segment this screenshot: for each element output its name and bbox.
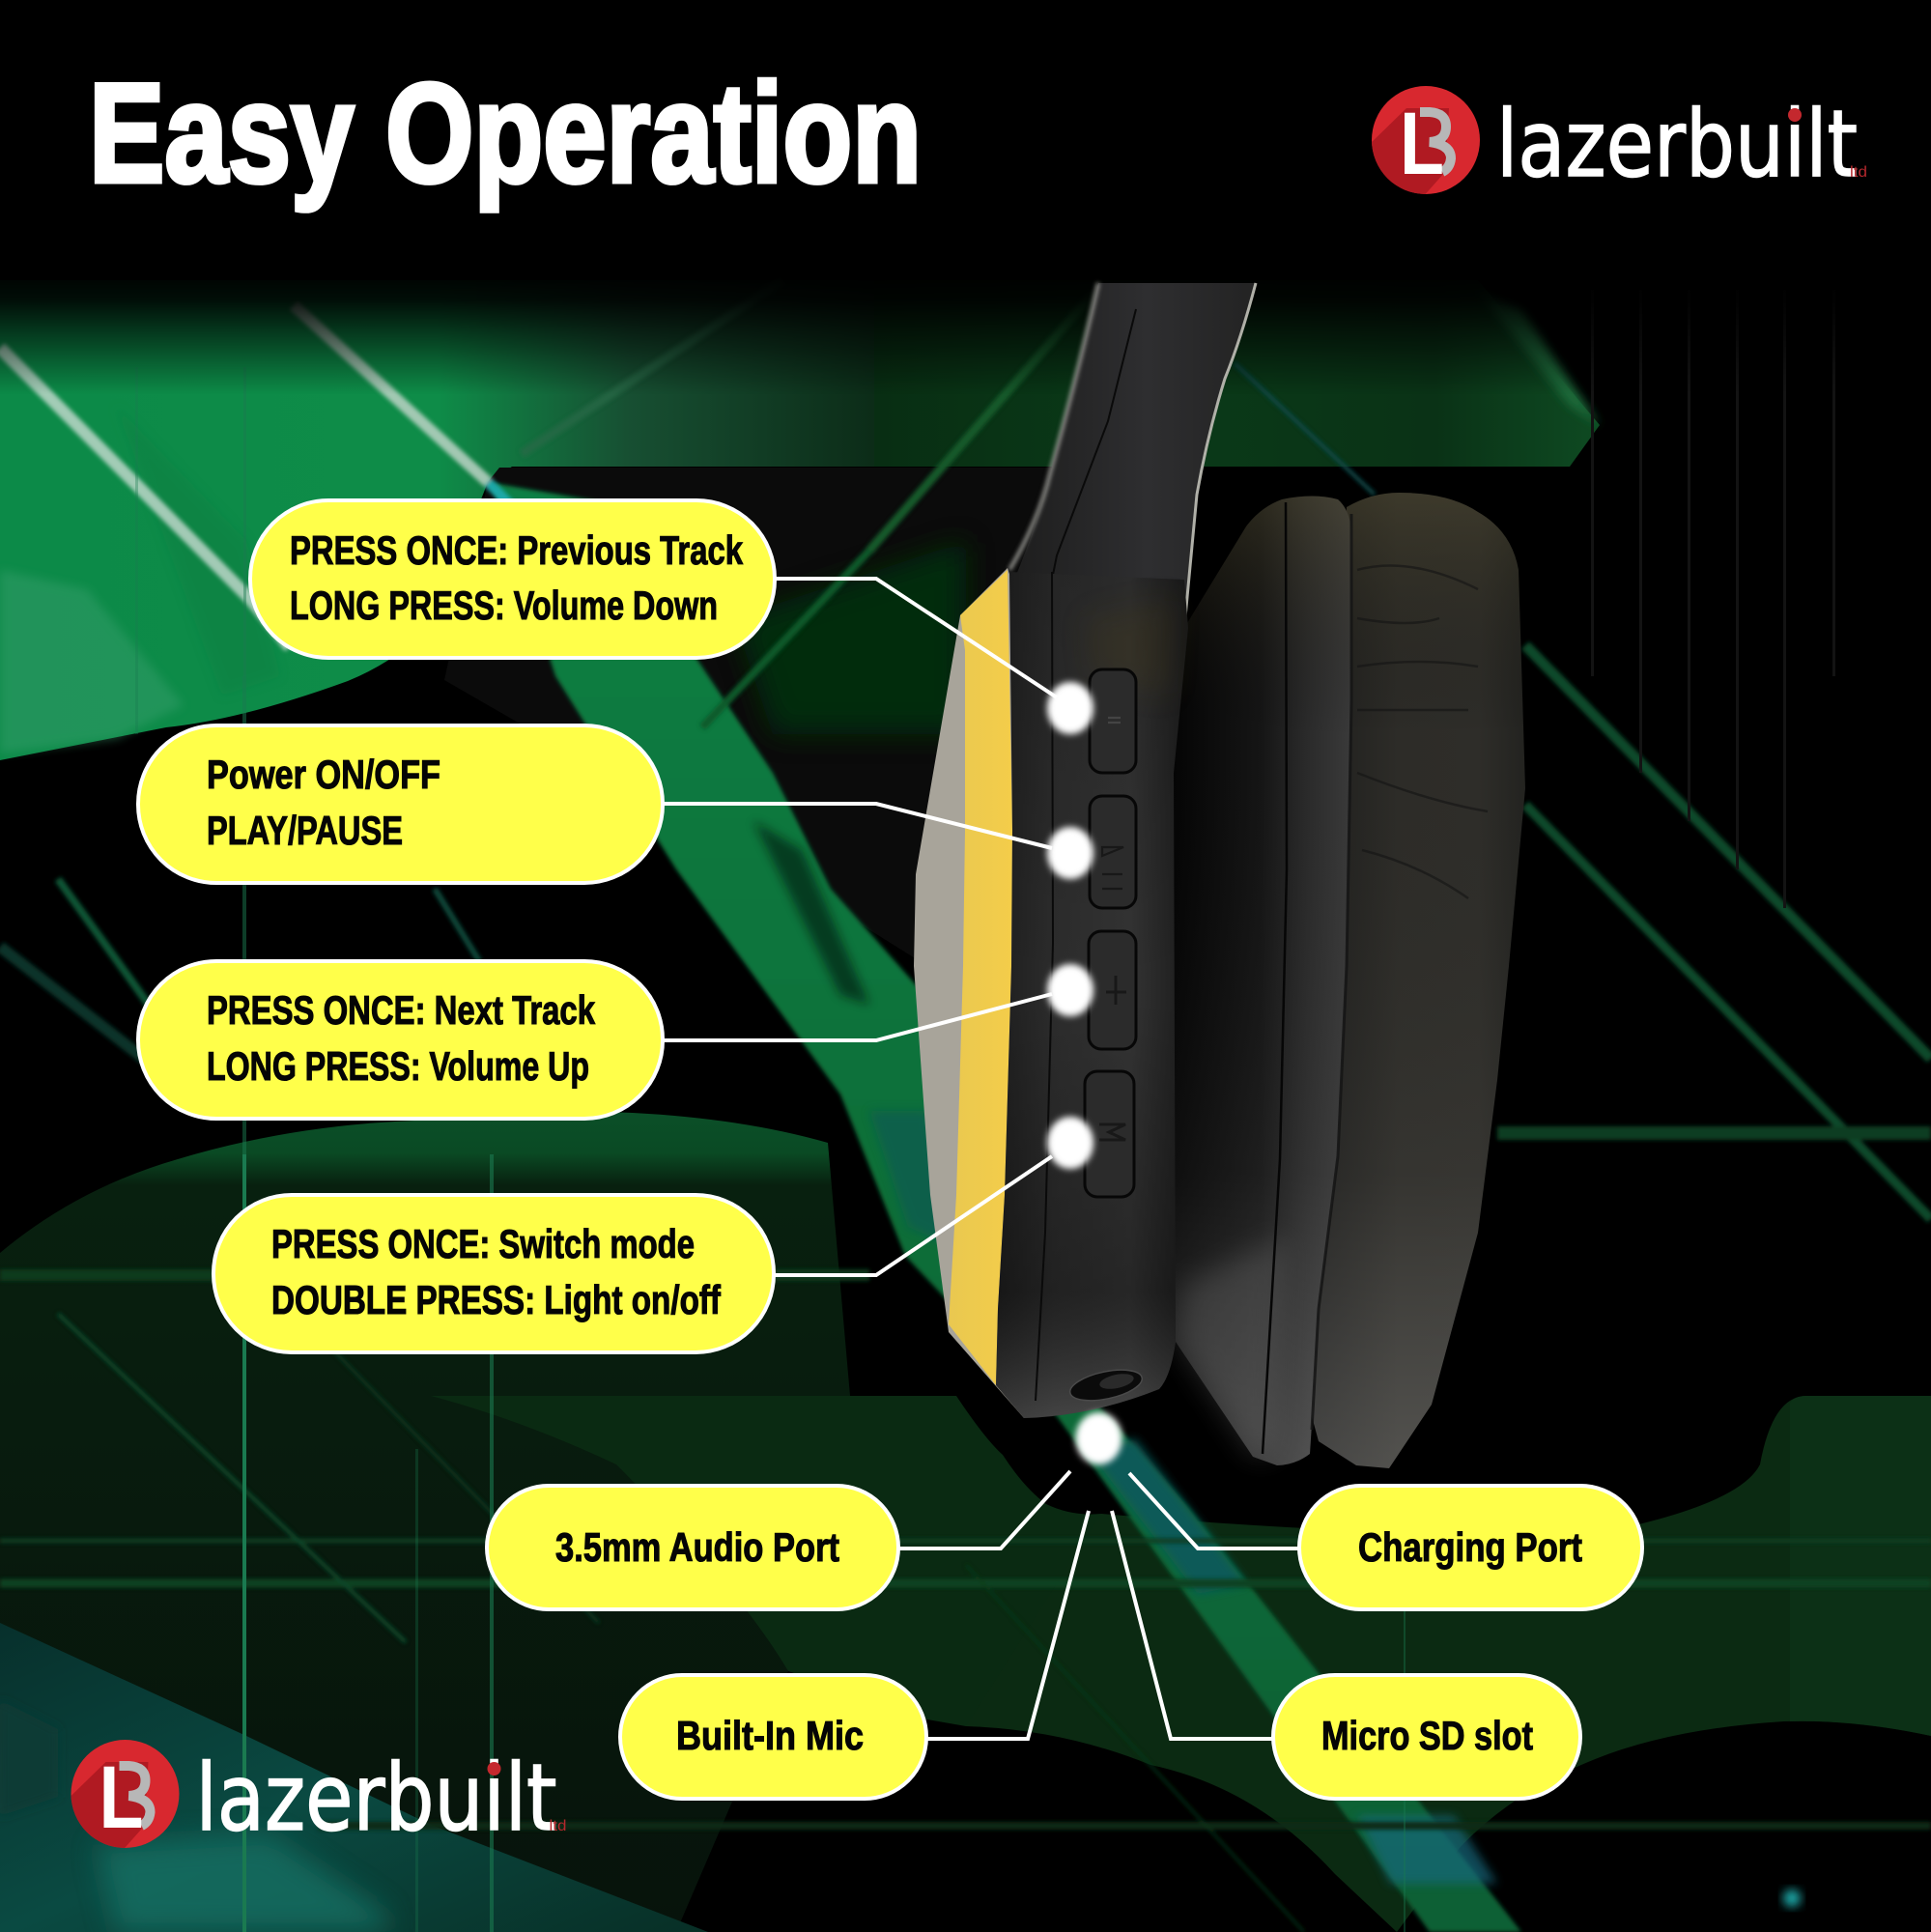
yellow band xyxy=(949,570,1012,1385)
logo: top right lazerbuilt: ltd xyxy=(1850,164,1867,181)
logo: bottom left lazerbuilt: L xyxy=(99,1748,143,1847)
pill: built-in mic: Built-In Mic xyxy=(676,1713,864,1758)
pill: previous track / volume down xyxy=(250,500,775,658)
logo: bottom left lazerbuilt: ltd xyxy=(549,1818,566,1834)
pill: switch mode / light xyxy=(213,1195,774,1352)
pill: micro sd slot xyxy=(1273,1675,1580,1799)
pill: next track / volume up xyxy=(138,961,663,1119)
logo: top right lazerbuilt: lazerbuilt xyxy=(1496,92,1858,198)
pill: previous track / volume down: PRESS ONCE: Previous Track xyxy=(290,527,743,573)
pill: power and play/pause: PLAY/PAUSE xyxy=(207,808,403,853)
button glyphs xyxy=(1099,718,1126,1140)
title: Easy Operation xyxy=(89,54,922,212)
headband xyxy=(1014,283,1256,628)
ear pad outer xyxy=(1294,493,1525,1468)
pill: micro sd slot: Micro SD slot xyxy=(1321,1713,1533,1758)
ear pad inner xyxy=(1169,497,1351,1465)
earcup shell xyxy=(914,568,1024,1418)
pill: audio port xyxy=(487,1486,898,1609)
logo: top right lazerbuilt: L xyxy=(1400,95,1444,193)
logo: bottom left lazerbuilt xyxy=(66,1740,566,1852)
pill: power and play/pause xyxy=(138,725,663,883)
pill: switch mode / light: PRESS ONCE: Switch mode xyxy=(271,1221,695,1266)
earcup body xyxy=(996,572,1188,1418)
pill: power and play/pause: Power ON/OFF xyxy=(207,752,440,797)
pill: previous track / volume down: LONG PRESS: Volume Down xyxy=(290,582,718,628)
hotspot dots xyxy=(1047,682,1122,1464)
pill: audio port: 3.5mm Audio Port xyxy=(555,1524,839,1570)
logo: top right lazerbuilt xyxy=(1367,86,1867,198)
buttons xyxy=(1085,669,1136,1197)
pill: charging port xyxy=(1299,1486,1642,1609)
logo: bottom left lazerbuilt: lazerbuilt xyxy=(195,1746,556,1852)
pill: next track / volume up: PRESS ONCE: Next Track xyxy=(207,987,596,1033)
audio jack port xyxy=(1067,1364,1145,1406)
pill: next track / volume up: LONG PRESS: Volume Up xyxy=(207,1043,589,1089)
pill: charging port: Charging Port xyxy=(1358,1524,1582,1570)
pill: built-in mic xyxy=(620,1675,926,1799)
headphones illustration xyxy=(914,283,1525,1468)
connector lines xyxy=(664,579,1298,1739)
pill: switch mode / light: DOUBLE PRESS: Light on/off xyxy=(271,1277,722,1322)
